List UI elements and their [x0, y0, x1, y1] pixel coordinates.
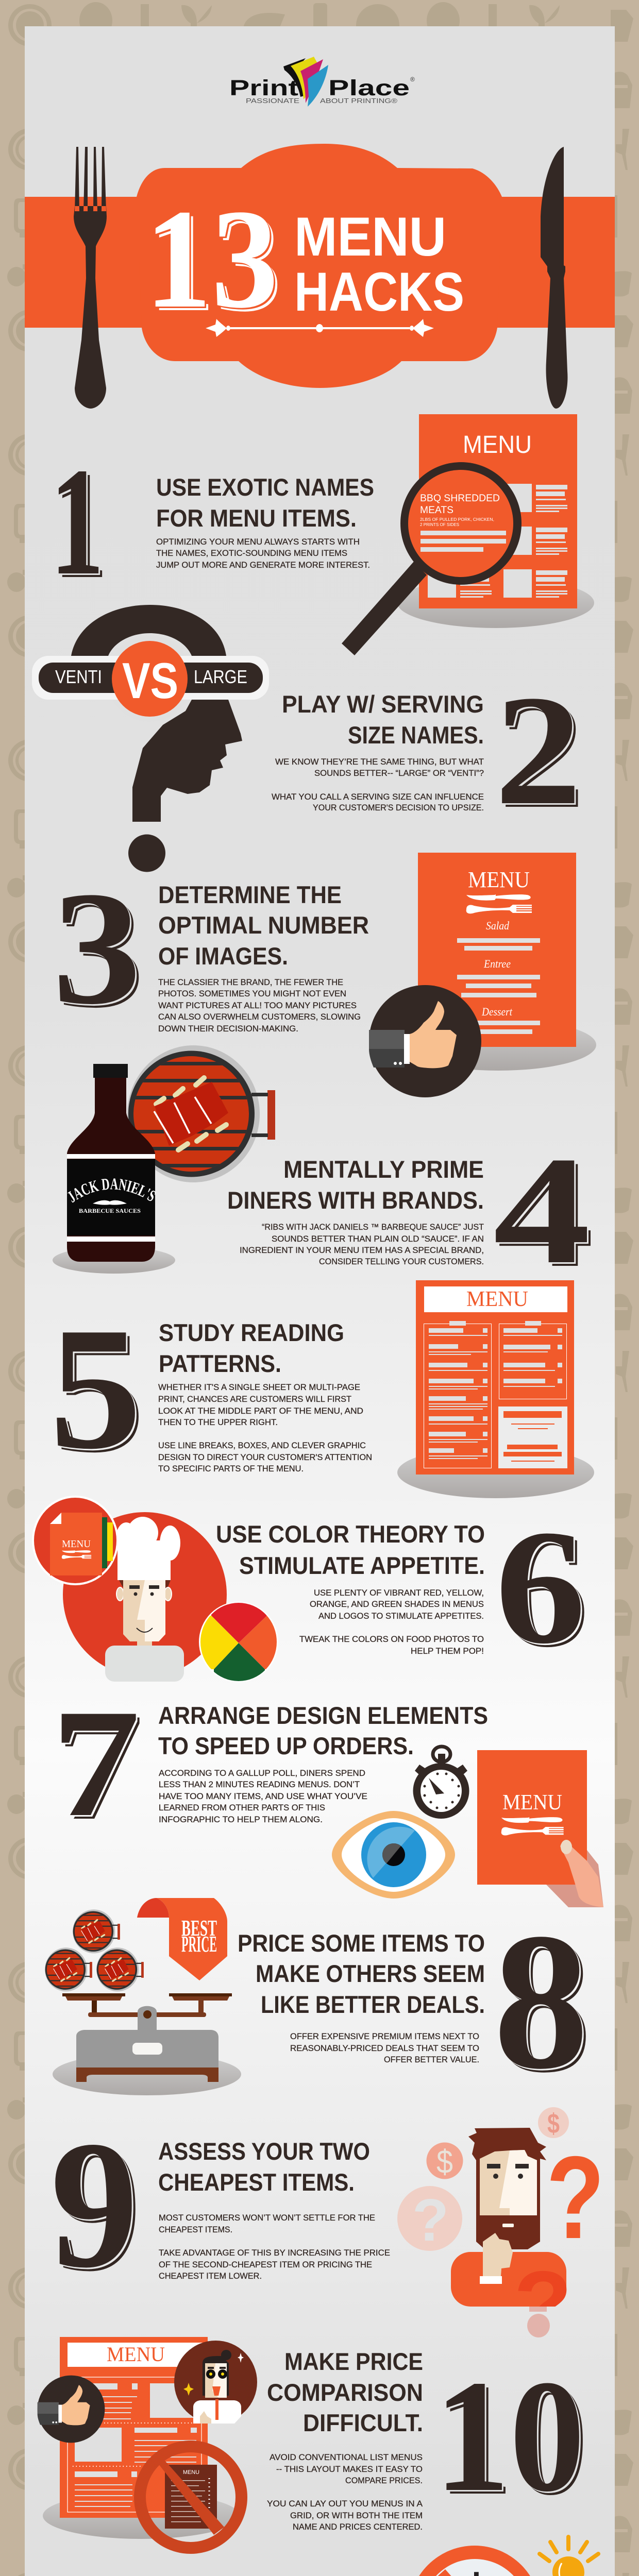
illustration: pondering bearded man with prices: ? — [412, 2187, 449, 2253]
section 8: price anchoring — [45, 1893, 588, 2110]
illustration: head question mark with venti vs large: VENTI — [55, 666, 102, 687]
heading: USE EXOTIC NAMES — [156, 473, 374, 501]
heading — [227, 1156, 484, 1214]
body text: PHOTOS. SOMETIMES YOU MIGHT NOT EVEN — [158, 989, 346, 998]
body text: YOUR CUSTOMER'S DECISION TO UPSIZE. — [313, 803, 484, 812]
header logo: Print Place: PASSIONATE — [246, 97, 299, 105]
section 5: reading patterns — [49, 1280, 594, 1498]
section 2: serving size names — [32, 605, 582, 872]
icon: fork — [74, 147, 107, 409]
body text: HELP THEM POP! — [411, 1647, 484, 1656]
cloche banner shape — [137, 144, 502, 388]
illustration: hand holding menu: MENU — [502, 1791, 562, 1815]
body text: OFFER BETTER VALUE. — [384, 2055, 479, 2064]
heading — [156, 473, 374, 532]
numeral 4: 4 — [493, 1125, 591, 1296]
body text — [156, 537, 370, 570]
body text: REASONABLY-PRICED DEALS THAT SEEM TO — [290, 2044, 479, 2053]
illustration: menu under magnifying glass: 2 PRINTS OF SIDES — [420, 522, 459, 527]
section 7: speed up orders — [52, 1677, 603, 1907]
body text: INFOGRAPHIC TO HELP THEM ALONG. — [159, 1815, 323, 1824]
heading: PRICE SOME ITEMS TO — [238, 1929, 485, 1957]
illustration: pondering bearded man with prices: $ — [547, 2108, 560, 2139]
numeral 2: 2 — [495, 663, 582, 838]
numeral 8: 8 — [494, 1893, 588, 2110]
heading: ASSESS YOUR TWO — [158, 2138, 370, 2165]
illustration: pondering bearded man with prices — [397, 2107, 599, 2337]
heading: SIZE NAMES. — [348, 721, 484, 749]
body text — [272, 757, 484, 812]
thumbs up circle — [38, 2376, 105, 2443]
body text: OFFER EXPENSIVE PREMIUM ITEMS NEXT TO — [290, 2032, 479, 2041]
illustration: pondering bearded man with prices: ? — [546, 2132, 604, 2263]
woman circle — [174, 2341, 257, 2424]
illustration: head question mark with venti vs large: LARGE — [194, 666, 247, 687]
heading — [267, 2348, 423, 2436]
body text: USE LINE BREAKS, BOXES, AND CLEVER GRAPHIC — [158, 1441, 366, 1450]
heading: PLAY W/ SERVING — [282, 690, 484, 718]
heading: DETERMINE THE — [158, 881, 342, 908]
illustration: layout menu with thumbs up, woman and crossed list menu — [38, 2337, 257, 2548]
body text: -- THIS LAYOUT MAKES IT EASY TO — [276, 2465, 423, 2474]
body text: YOU CAN LAY OUT YOU MENUS IN A — [267, 2499, 423, 2509]
heading: OF IMAGES. — [158, 942, 288, 970]
illustration: elegant menu with thumbs up — [369, 853, 596, 1097]
section 11: omit dollar signs — [40, 2537, 599, 2576]
illustration: pondering bearded man with prices: ? — [514, 2252, 572, 2358]
heading: LIKE BETTER DEALS. — [261, 1991, 485, 2018]
section 9: two cheapest items — [55, 2107, 599, 2337]
heading: COMPARISON — [267, 2379, 423, 2406]
numeral 10: 10 — [434, 2347, 585, 2525]
heading: PATTERNS. — [159, 1350, 281, 1377]
body text: HAVE TOO MANY ITEMS, AND USE WHAT YOU’VE — [159, 1792, 367, 1801]
body text: WE KNOW THEY’RE THE SAME THING, BUT WHAT — [275, 757, 484, 767]
body text — [240, 1223, 484, 1266]
body text: AND LOGOS TO STIMULATE APPETITES. — [318, 1612, 484, 1621]
body text: DESIGN TO DIRECT YOUR CUSTOMER'S ATTENTION — [158, 1453, 372, 1462]
body text: THEN TO THE UPPER RIGHT. — [158, 1418, 278, 1427]
illustration: Jack Daniel's sauce bottle: JACK DANIEL'S — [68, 1178, 156, 1202]
body text — [159, 2213, 390, 2281]
menu circle — [32, 1496, 119, 1585]
ornament — [206, 319, 434, 337]
color wheel — [199, 1602, 277, 1681]
body text: TAKE ADVANTAGE OF THIS BY INCREASING THE PRICE — [159, 2248, 390, 2258]
heading: MENTALLY PRIME — [283, 1156, 484, 1183]
no-list-menu sign — [140, 2446, 241, 2548]
no-list-menu sign: MENU — [183, 2469, 199, 2476]
chef hat — [116, 1517, 180, 1580]
section 3: optimal number of images — [53, 853, 596, 1097]
illustration: elegant menu with thumbs up: Entree — [483, 957, 511, 970]
body text: TO SPECIFIC PARTS OF THE MENU. — [158, 1464, 304, 1473]
heading: STUDY READING — [159, 1319, 344, 1346]
icon: eye — [332, 1811, 455, 1899]
body text: CONSIDER TELLING YOUR CUSTOMERS. — [319, 1257, 484, 1266]
body text: GRID, OR WITH BOTH THE ITEM — [290, 2511, 423, 2520]
body text: OF THE SECOND-CHEAPEST ITEM OR PRICING THE — [159, 2260, 372, 2269]
numeral 3: 3 — [53, 858, 141, 1038]
title numeral: 13 — [145, 180, 278, 337]
heading: FOR MENU ITEMS. — [156, 504, 357, 532]
icon: stopwatch — [413, 1747, 469, 1819]
body text — [299, 1588, 484, 1656]
numeral 7: 7 — [52, 1677, 140, 1849]
body text: AVOID CONVENTIONAL LIST MENUS — [270, 2453, 423, 2462]
illustration: menu under magnifying glass: MEATS — [420, 505, 453, 516]
icon: knife — [541, 147, 567, 409]
body text: OPTIMIZING YOUR MENU ALWAYS STARTS WITH — [156, 537, 360, 547]
grill stack — [45, 1909, 144, 1991]
body text: ORANGE, AND GREEN SHADES IN MENUS — [310, 1600, 484, 1609]
illustration: elegant menu with thumbs up: Dessert — [481, 1005, 513, 1018]
heading — [282, 690, 484, 749]
body text: NAME AND PRICES CENTERED. — [293, 2522, 423, 2532]
body text: USE PLENTY OF VIBRANT RED, YELLOW, — [314, 1588, 484, 1598]
heading: STIMULATE APPETITE. — [239, 1552, 485, 1579]
heading: USE COLOR THEORY TO — [216, 1520, 485, 1548]
illustration: elegant menu with thumbs up: MENU — [468, 867, 530, 892]
header logo: Print Place: Place — [328, 76, 410, 100]
chef face — [105, 1580, 184, 1682]
heading: DINERS WITH BRANDS. — [227, 1187, 484, 1214]
body text: WHETHER IT'S A SINGLE SHEET OR MULTI-PAGE — [158, 1383, 360, 1392]
heading — [238, 1929, 485, 2018]
section 6: color theory — [32, 1496, 586, 1690]
body text: COMPARE PRICES. — [345, 2476, 423, 2485]
illustration: Jack Daniel's sauce bottle — [53, 1064, 175, 1274]
body text: CHEAPEST ITEM LOWER. — [159, 2272, 262, 2281]
body text: THE NAMES, EXOTIC-SOUNDING MENU ITEMS — [156, 549, 347, 558]
body text: THE CLASSIER THE BRAND, THE FEWER THE — [158, 978, 343, 987]
heading — [158, 1702, 488, 1759]
heading: MAKE OTHERS SEEM — [256, 1960, 485, 1987]
best price tag — [137, 1898, 227, 1980]
title banner — [25, 144, 615, 388]
menu page: MENU — [107, 2343, 165, 2366]
body text: ACCORDING TO A GALLUP POLL, DINERS SPEND — [159, 1769, 365, 1778]
heading — [158, 2138, 370, 2196]
heading: CHEAPEST ITEMS. — [158, 2168, 355, 2196]
illustration: Jack Daniel's sauce bottle: BARBECUE SAUCES — [79, 1208, 141, 1214]
illustration: scale with grills and best price tag — [45, 1898, 241, 2095]
illustration: head question mark with venti vs large: VS — [122, 652, 178, 709]
section 4: brands — [53, 1045, 591, 1296]
body text: LESS THAN 2 MINUTES READING MENUS. DON’T — [159, 1780, 360, 1789]
numeral 9: 9 — [51, 2103, 138, 2306]
illustration: head question mark with venti vs large — [32, 605, 269, 872]
illustration: grill with ribs — [127, 1045, 275, 1182]
illustration: menu under magnifying glass: MENU — [463, 431, 532, 459]
body text: “RIBS WITH JACK DANIELS ™ BARBEQUE SAUCE” JUST — [262, 1223, 484, 1232]
body text: CHEAPEST ITEMS. — [159, 2225, 232, 2234]
body text: SOUNDS BETTER THAN PLAIN OLD “SAUCE”. IF AN — [272, 1234, 484, 1244]
body text: WANT PICTURES AT ALL! TOO MANY PICTURES — [158, 1001, 357, 1010]
heading: TO SPEED UP ORDERS. — [158, 1732, 414, 1759]
body text: INGREDIENT IN YOUR MENU ITEM HAS A SPECIAL BRAND, — [240, 1246, 484, 1255]
numeral 6: 6 — [495, 1496, 586, 1677]
menu circle: MENU — [62, 1538, 91, 1550]
section 10: price comparison — [38, 2337, 585, 2548]
orange band — [25, 197, 615, 328]
heading — [216, 1520, 485, 1579]
heading — [159, 1319, 344, 1377]
body text: TWEAK THE COLORS ON FOOD PHOTOS TO — [299, 1635, 484, 1644]
title words: MENU — [294, 206, 446, 267]
icon: light bulb — [540, 2537, 598, 2576]
illustration: menu under magnifying glass: 2LBS OF PULLED PORK, CHICKEN, — [420, 517, 494, 522]
illustration: two-column menu layout: MENU — [466, 1287, 528, 1311]
best price tag: PRICE — [181, 1931, 217, 1957]
best price tag: BEST — [181, 1916, 217, 1941]
heading: ARRANGE DESIGN ELEMENTS — [158, 1702, 488, 1729]
header logo: Print Place: ABOUT PRINTING® — [320, 97, 398, 105]
illustration: menu under magnifying glass: BBQ SHREDDED — [420, 493, 500, 504]
heading: MAKE PRICE — [284, 2348, 423, 2375]
menu page — [60, 2337, 208, 2518]
scale — [62, 1993, 232, 2082]
section 1: exotic names — [50, 414, 594, 655]
body text: DOWN THEIR DECISION-MAKING. — [158, 1024, 298, 1033]
body text: LOOK AT THE MIDDLE PART OF THE MENU, AND — [158, 1406, 363, 1416]
illustration: hand holding menu — [477, 1750, 603, 1907]
illustration: menu under magnifying glass — [342, 414, 594, 655]
heading: DIFFICULT. — [303, 2409, 423, 2436]
body text: WHAT YOU CALL A SERVING SIZE CAN INFLUENCE — [272, 792, 484, 802]
body text — [159, 1769, 367, 1824]
body text: PRINT, CHANCES ARE CUSTOMERS WILL FIRST — [158, 1395, 351, 1404]
icon: crossed dollar sign — [409, 2546, 541, 2576]
body text — [267, 2453, 423, 2532]
body text: LEARNED FROM OTHER PARTS OF THIS — [159, 1803, 325, 1812]
header logo: Print Place — [229, 57, 415, 107]
body text: SOUNDS BETTER-- “LARGE” OR “VENTI”? — [314, 769, 484, 778]
body text — [290, 2032, 479, 2064]
illustration: elegant menu with thumbs up: Salad — [486, 919, 510, 932]
heading — [158, 881, 369, 970]
illustration: two-column menu layout — [397, 1280, 594, 1498]
illustration: pondering bearded man with prices: $ — [436, 2143, 453, 2180]
illustration: chef with menu and color wheel — [32, 1496, 281, 1690]
header logo: Print Place: Print — [229, 76, 298, 100]
title words: HACKS — [294, 261, 464, 323]
title words — [294, 206, 464, 323]
body text: JUMP OUT MORE AND GENERATE MORE INTEREST. — [156, 561, 370, 570]
body text: MOST CUSTOMERS WON’T WON’T SETTLE FOR THE — [159, 2213, 375, 2223]
numeral 1: 1 — [50, 436, 104, 607]
body text — [158, 1383, 372, 1473]
heading: OPTIMAL NUMBER — [158, 911, 369, 939]
body text — [158, 978, 361, 1033]
body text: CAN ALSO OVERWHELM CUSTOMERS, SLOWING — [158, 1012, 361, 1022]
header logo: Print Place: ® — [410, 76, 415, 83]
numeral 5: 5 — [49, 1291, 142, 1485]
